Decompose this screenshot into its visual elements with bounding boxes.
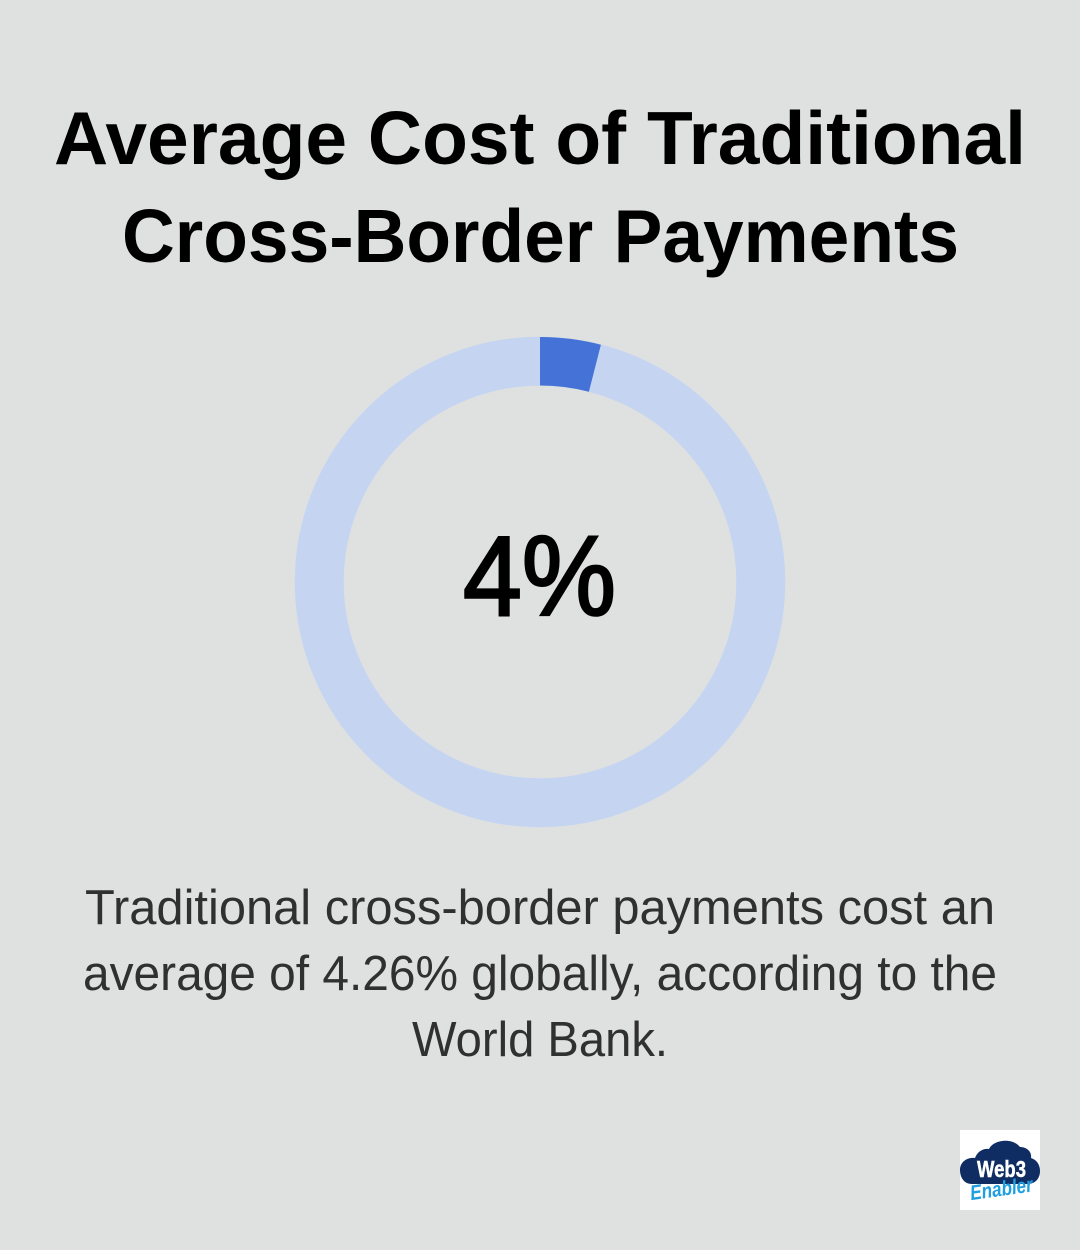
logo wordmark: Web3 xyxy=(977,1156,1026,1182)
center value: 4% xyxy=(463,513,616,639)
logo: Web3 Enabler xyxy=(960,1130,1040,1210)
donut value segment: 4% xyxy=(540,337,601,392)
description text: Traditional cross-border payments cost an xyxy=(85,881,995,935)
title: Average Cost of Traditional xyxy=(54,96,1026,180)
logo script: Enabler xyxy=(969,1173,1036,1205)
icon: cloud xyxy=(960,1141,1040,1184)
title: Cross-Border Payments xyxy=(122,194,959,278)
donut track xyxy=(319,361,761,803)
description text xyxy=(83,881,997,1067)
donut chart xyxy=(319,337,761,803)
title xyxy=(54,96,1026,278)
description text: average of 4.26% globally, according to the xyxy=(83,947,997,1001)
description text: World Bank. xyxy=(412,1013,668,1067)
